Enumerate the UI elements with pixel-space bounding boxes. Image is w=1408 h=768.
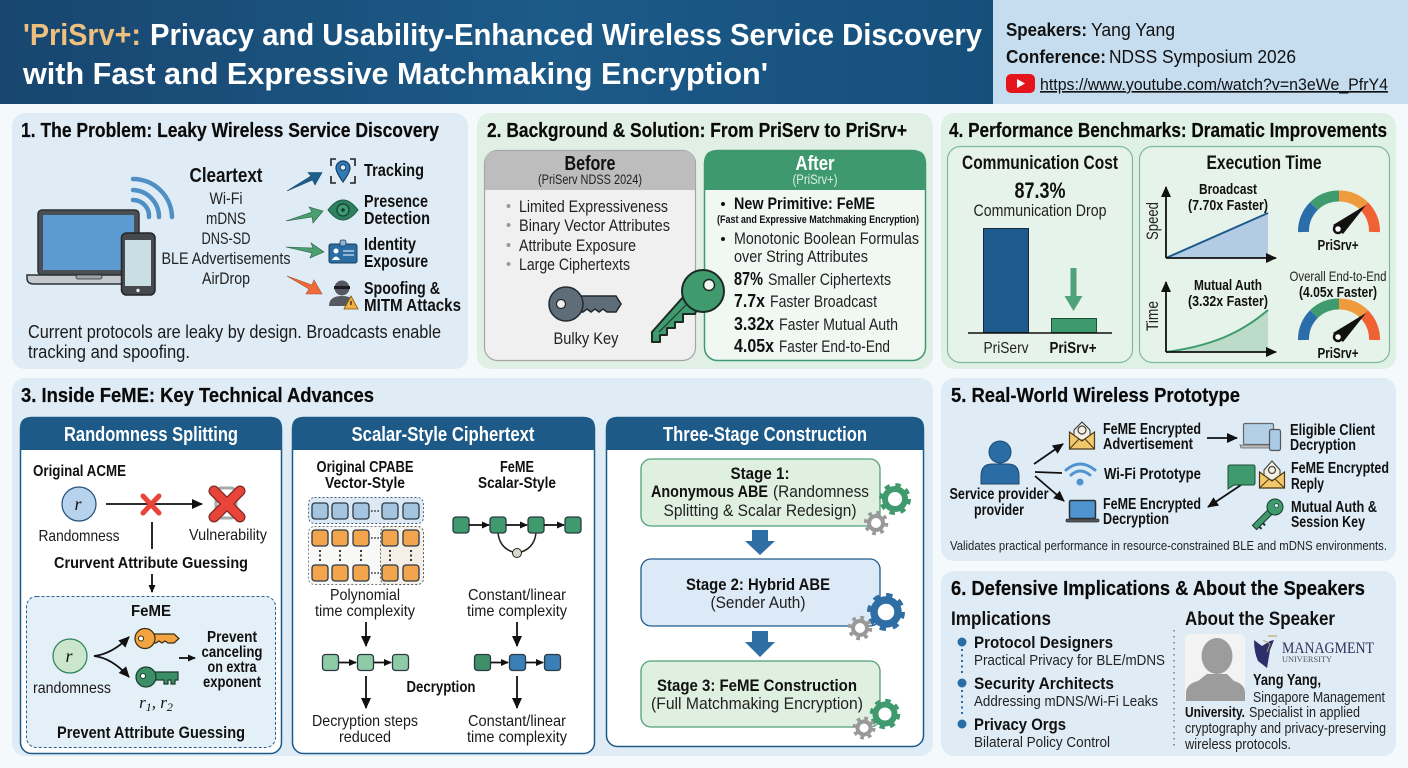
scalar-style column: time complexity: [467, 729, 567, 746]
icon: big green key: [652, 270, 724, 342]
FeME dashed box: 2: [167, 700, 173, 714]
before card: [484, 150, 696, 360]
icon: service provider: [950, 441, 1048, 519]
communication cost card: [948, 146, 1132, 362]
scalar-style column: Constant/linear: [468, 713, 567, 730]
heading 1: 1. The Problem: Leaky Wireless Service Discovery: [21, 119, 440, 142]
client label: Eligible Client: [1290, 422, 1376, 439]
scalar-style column: time complexity: [467, 603, 567, 620]
vector-style column: [308, 459, 424, 746]
stage 1: Stage 1:: [730, 465, 790, 483]
execution time card: Execution Time: [1206, 153, 1322, 174]
icon: reply envelope: [1260, 461, 1284, 488]
risk labels: Exposure: [364, 251, 428, 271]
university logo: UNIVERSITY: [1282, 655, 1332, 664]
speaker info panel: [993, 0, 1408, 104]
risk labels: Presence: [364, 191, 428, 211]
before card: Attribute Exposure: [519, 236, 636, 255]
before card: Bulky Key: [554, 329, 619, 348]
original ACME flow: r: [74, 494, 82, 514]
speaker bio: Specialist in applied: [1249, 705, 1360, 721]
panel 1: the problem: [12, 113, 468, 369]
panel 2: background and solution: [477, 113, 933, 369]
implications list: Practical Privacy for BLE/mDNS: [974, 652, 1165, 669]
icon: eye: [328, 200, 358, 220]
speaker bio: [1184, 672, 1386, 753]
FeME dashed box: 1: [146, 700, 152, 714]
chart: broadcast speed: (7.70x Faster): [1188, 198, 1268, 214]
after card: After: [796, 153, 835, 175]
icon: speaker avatar: [1185, 634, 1245, 701]
icon: green key: [136, 667, 178, 687]
decryption label: Decryption: [1103, 511, 1169, 528]
heading 6: 6. Defensive Implications & About the Speakers: [951, 577, 1365, 600]
card: three-stage construction: [606, 417, 924, 746]
speaker bio: Yang Yang,: [1253, 672, 1321, 689]
before card: Limited Expressiveness: [519, 197, 668, 216]
arrow: stage 2 to 3: [745, 631, 775, 657]
stage 3: Stage 3: FeME Construction: [657, 677, 857, 695]
icon: youtube: [1006, 74, 1035, 93]
after card: 87%: [734, 269, 763, 289]
risk labels: Identity: [364, 234, 416, 254]
communication cost card: Communication Drop: [974, 202, 1106, 220]
after card: Faster End-to-End: [779, 337, 890, 356]
implications list: Bilateral Policy Control: [974, 734, 1110, 751]
implications list: Protocol Designers: [974, 633, 1113, 652]
FeME dashed box: Prevent: [207, 629, 257, 646]
panel 4: performance benchmarks: [941, 113, 1396, 369]
protocol list: [162, 164, 290, 288]
heading 2: 2. Background & Solution: From PriServ to PriSrv+: [487, 119, 907, 142]
summary text: [28, 322, 441, 362]
icon: service provider: provider: [974, 502, 1024, 519]
original ACME flow: Original ACME: [33, 463, 126, 480]
FeME dashed box: randomness: [33, 680, 111, 697]
arrow: to identity: [286, 243, 324, 258]
vector-style column: time complexity: [315, 603, 415, 620]
panel 3: inside FeME: [12, 378, 933, 756]
stage 3: [641, 661, 880, 727]
FeME dashed box: , r: [152, 693, 167, 712]
chart: mutual auth time: (3.32x Faster): [1188, 294, 1268, 310]
after card: 7.7x: [734, 291, 765, 311]
implications list: Privacy Orgs: [974, 715, 1066, 734]
implications list: [951, 608, 1165, 751]
stage 1: [641, 459, 880, 526]
panel 5: real-world prototype: [941, 378, 1396, 561]
implications list: Implications: [951, 608, 1051, 630]
icon: laptop and phone with wifi: [27, 179, 172, 295]
after card: Faster Broadcast: [770, 292, 877, 311]
implications list: Security Architects: [974, 674, 1114, 693]
icon: encrypted envelope: [1070, 422, 1094, 449]
after card: [704, 150, 926, 360]
before card: (PriServ NDSS 2024): [538, 172, 642, 187]
gauge: broadcast: [1303, 196, 1375, 254]
risk labels: MITM Attacks: [364, 295, 461, 315]
vector-style column: reduced: [339, 729, 391, 746]
after card: New Primitive: FeME: [734, 194, 875, 213]
scalar-style column: [453, 459, 581, 746]
icon: wifi: [1066, 464, 1095, 484]
decryption label: [1103, 496, 1201, 528]
card: three-stage construction: Three-Stage Construction: [663, 424, 867, 446]
after card: over String Attributes: [734, 247, 868, 266]
after card: (PriSrv+): [792, 172, 838, 187]
icon: stage 2 gears: [850, 596, 902, 638]
advertisement label: FeME Encrypted: [1103, 421, 1201, 438]
before card: Large Ciphertexts: [519, 255, 630, 274]
session key label: [1291, 499, 1377, 531]
university logo: MANAGMENT: [1282, 640, 1374, 657]
icon: attacker with warning: [329, 280, 358, 309]
risk labels: Detection: [364, 208, 430, 228]
wifi prototype label: Wi-Fi Prototype: [1104, 466, 1201, 483]
bar chart: PriServ: [984, 340, 1028, 357]
bar chart: PriSrv+: [1050, 340, 1096, 357]
execution time card: [1140, 146, 1390, 362]
decryption label: FeME Encrypted: [1103, 496, 1201, 513]
after card: Smaller Ciphertexts: [768, 270, 891, 289]
scalar-style column: Scalar-Style: [478, 475, 556, 492]
gauge: end to end: [1290, 268, 1386, 362]
icon: session key: [1249, 496, 1286, 533]
FeME dashed box: canceling: [202, 644, 262, 661]
protocol list: AirDrop: [202, 269, 250, 288]
chart: mutual auth time: [1144, 278, 1276, 352]
arrow: to spoofing: [287, 276, 322, 294]
reply label: [1291, 460, 1389, 493]
protocol list: DNS-SD: [202, 229, 250, 248]
original ACME flow: Randomness: [38, 528, 120, 545]
session key label: Mutual Auth &: [1291, 499, 1377, 516]
stage 1: Anonymous ABE: [651, 483, 768, 501]
chart: broadcast speed: Speed: [1144, 202, 1162, 240]
vector-style column: Vector-Style: [325, 475, 405, 492]
FeME dashed box: exponent: [203, 674, 261, 691]
arrow: to tracking: [287, 172, 322, 191]
original ACME flow: Crurvent Attribute Guessing: [54, 555, 248, 572]
protocol list: BLE Advertisements: [162, 249, 290, 268]
speaker info panel: NDSS Symposium 2026: [1109, 47, 1296, 67]
speaker info panel: Yang Yang: [1091, 20, 1175, 40]
FeME dashed box: on extra: [208, 659, 257, 676]
icon: orange key: [135, 628, 179, 648]
stage 1: (Randomness: [773, 483, 869, 501]
FeME dashed box: r: [139, 693, 146, 712]
vector-style column: Decryption steps: [312, 713, 418, 730]
risk labels: [364, 160, 461, 315]
risk labels: Spoofing &: [364, 278, 440, 298]
icon: chat bubble: [1228, 465, 1255, 489]
heading 3: 3. Inside FeME: Key Technical Advances: [21, 384, 374, 407]
scalar-style column: FeME: [500, 459, 534, 476]
client label: Decryption: [1290, 437, 1356, 454]
chart: mutual auth time: Time: [1144, 301, 1162, 331]
gauge: end to end: PriSrv+: [1318, 346, 1358, 362]
risk labels: Tracking: [364, 160, 424, 180]
summary text: tracking and spoofing.: [28, 342, 190, 362]
protocol list: Wi-Fi: [210, 189, 242, 208]
arrow: stage 1 to 2: [745, 530, 775, 555]
after card: (Fast and Expressive Matchmaking Encryption): [717, 214, 919, 226]
about the speaker: About the Speaker: [1185, 608, 1335, 630]
gauge: end to end: (4.05x Faster): [1299, 285, 1377, 301]
after card: Faster Mutual Auth: [779, 315, 898, 334]
FeME dashed box: FeME: [131, 603, 171, 620]
card: scalar-style ciphertext: Scalar-Style Ciphertext: [352, 424, 535, 446]
arrow: to presence: [286, 207, 323, 223]
protocol list: mDNS: [206, 209, 246, 228]
icon: stage 3 gears: [854, 702, 898, 738]
decryption label: Decryption: [406, 679, 476, 696]
title: 'PriSrv+:: [23, 17, 141, 52]
icon: id card: [329, 240, 357, 263]
before card: Before: [564, 153, 616, 175]
title: [22, 17, 983, 91]
speaker info panel: Conference:: [1006, 47, 1106, 67]
panel 6: implications and speakers: [941, 571, 1396, 756]
implications list: Addressing mDNS/Wi-Fi Leaks: [974, 693, 1158, 710]
communication cost card: Communication Cost: [962, 153, 1119, 174]
card: scalar-style ciphertext: [292, 417, 595, 754]
client label: [1290, 422, 1376, 454]
chart: broadcast speed: [1144, 182, 1276, 258]
original ACME flow: Vulnerability: [189, 527, 267, 544]
chart: broadcast speed: Broadcast: [1199, 182, 1257, 198]
speaker bio: Singapore Management: [1253, 690, 1385, 706]
card: randomness splitting: Randomness Splitting: [64, 424, 238, 446]
university logo: [1254, 636, 1374, 668]
stage 2: (Sender Auth): [710, 594, 806, 612]
stage 1: Splitting & Scalar Redesign): [664, 502, 856, 520]
after card: 4.05x: [734, 336, 774, 356]
advertisement label: [1103, 421, 1201, 453]
gauge: end to end: Overall End-to-End: [1290, 268, 1386, 284]
before card: Binary Vector Attributes: [519, 216, 670, 235]
advertisement label: Advertisement: [1103, 436, 1194, 453]
after card: Monotonic Boolean Formulas: [734, 229, 919, 248]
title: Privacy and Usability-Enhanced Wireless Service Discovery: [150, 17, 983, 52]
session key label: Session Key: [1291, 514, 1365, 531]
protocol list: Cleartext: [190, 164, 263, 187]
icon: tracking pin: [331, 159, 355, 183]
communication cost card: 87.3%: [1014, 178, 1066, 203]
FeME dashed box: Prevent Attribute Guessing: [57, 724, 245, 742]
flow arrows: [1034, 438, 1244, 507]
icon: client devices: [1240, 424, 1280, 450]
reply label: Reply: [1291, 476, 1324, 493]
icon: laptop: [1066, 500, 1099, 522]
chart: mutual auth time: Mutual Auth: [1194, 278, 1262, 294]
about the speaker: [1184, 608, 1386, 753]
stage 2: Stage 2: Hybrid ABE: [686, 576, 830, 594]
FeME dashed box: [26, 596, 276, 748]
icon: stage 1 gears: [866, 486, 908, 533]
speaker info panel: Speakers:: [1006, 20, 1087, 40]
icon: bulky grey key: [549, 287, 621, 321]
speaker bio: wireless protocols.: [1184, 737, 1291, 753]
speaker bio: University.: [1185, 705, 1245, 721]
stage 2: [641, 559, 880, 626]
icon: service provider: Service provider: [950, 486, 1048, 503]
scalar-style column: Constant/linear: [468, 587, 567, 604]
vector-style column: Original CPABE: [316, 459, 414, 476]
after card: 3.32x: [734, 314, 774, 334]
original ACME flow: [33, 463, 267, 592]
FeME dashed box: r: [65, 646, 73, 666]
summary text: Current protocols are leaky by design. Broadcasts enable: [28, 322, 441, 342]
card: randomness splitting: [20, 417, 282, 754]
bar chart: [968, 228, 1112, 357]
speaker info panel: https://www.youtube.com/watch?v=n3eWe_PfrY4: [1040, 76, 1388, 94]
vector-style column: Polynomial: [330, 587, 400, 604]
gauge: broadcast: PriSrv+: [1318, 238, 1358, 254]
heading 5: 5. Real-World Wireless Prototype: [951, 384, 1240, 407]
header banner: [0, 0, 993, 104]
stage 3: (Full Matchmaking Encryption): [651, 695, 863, 713]
title: with Fast and Expressive Matchmaking Encryption': [22, 56, 768, 91]
